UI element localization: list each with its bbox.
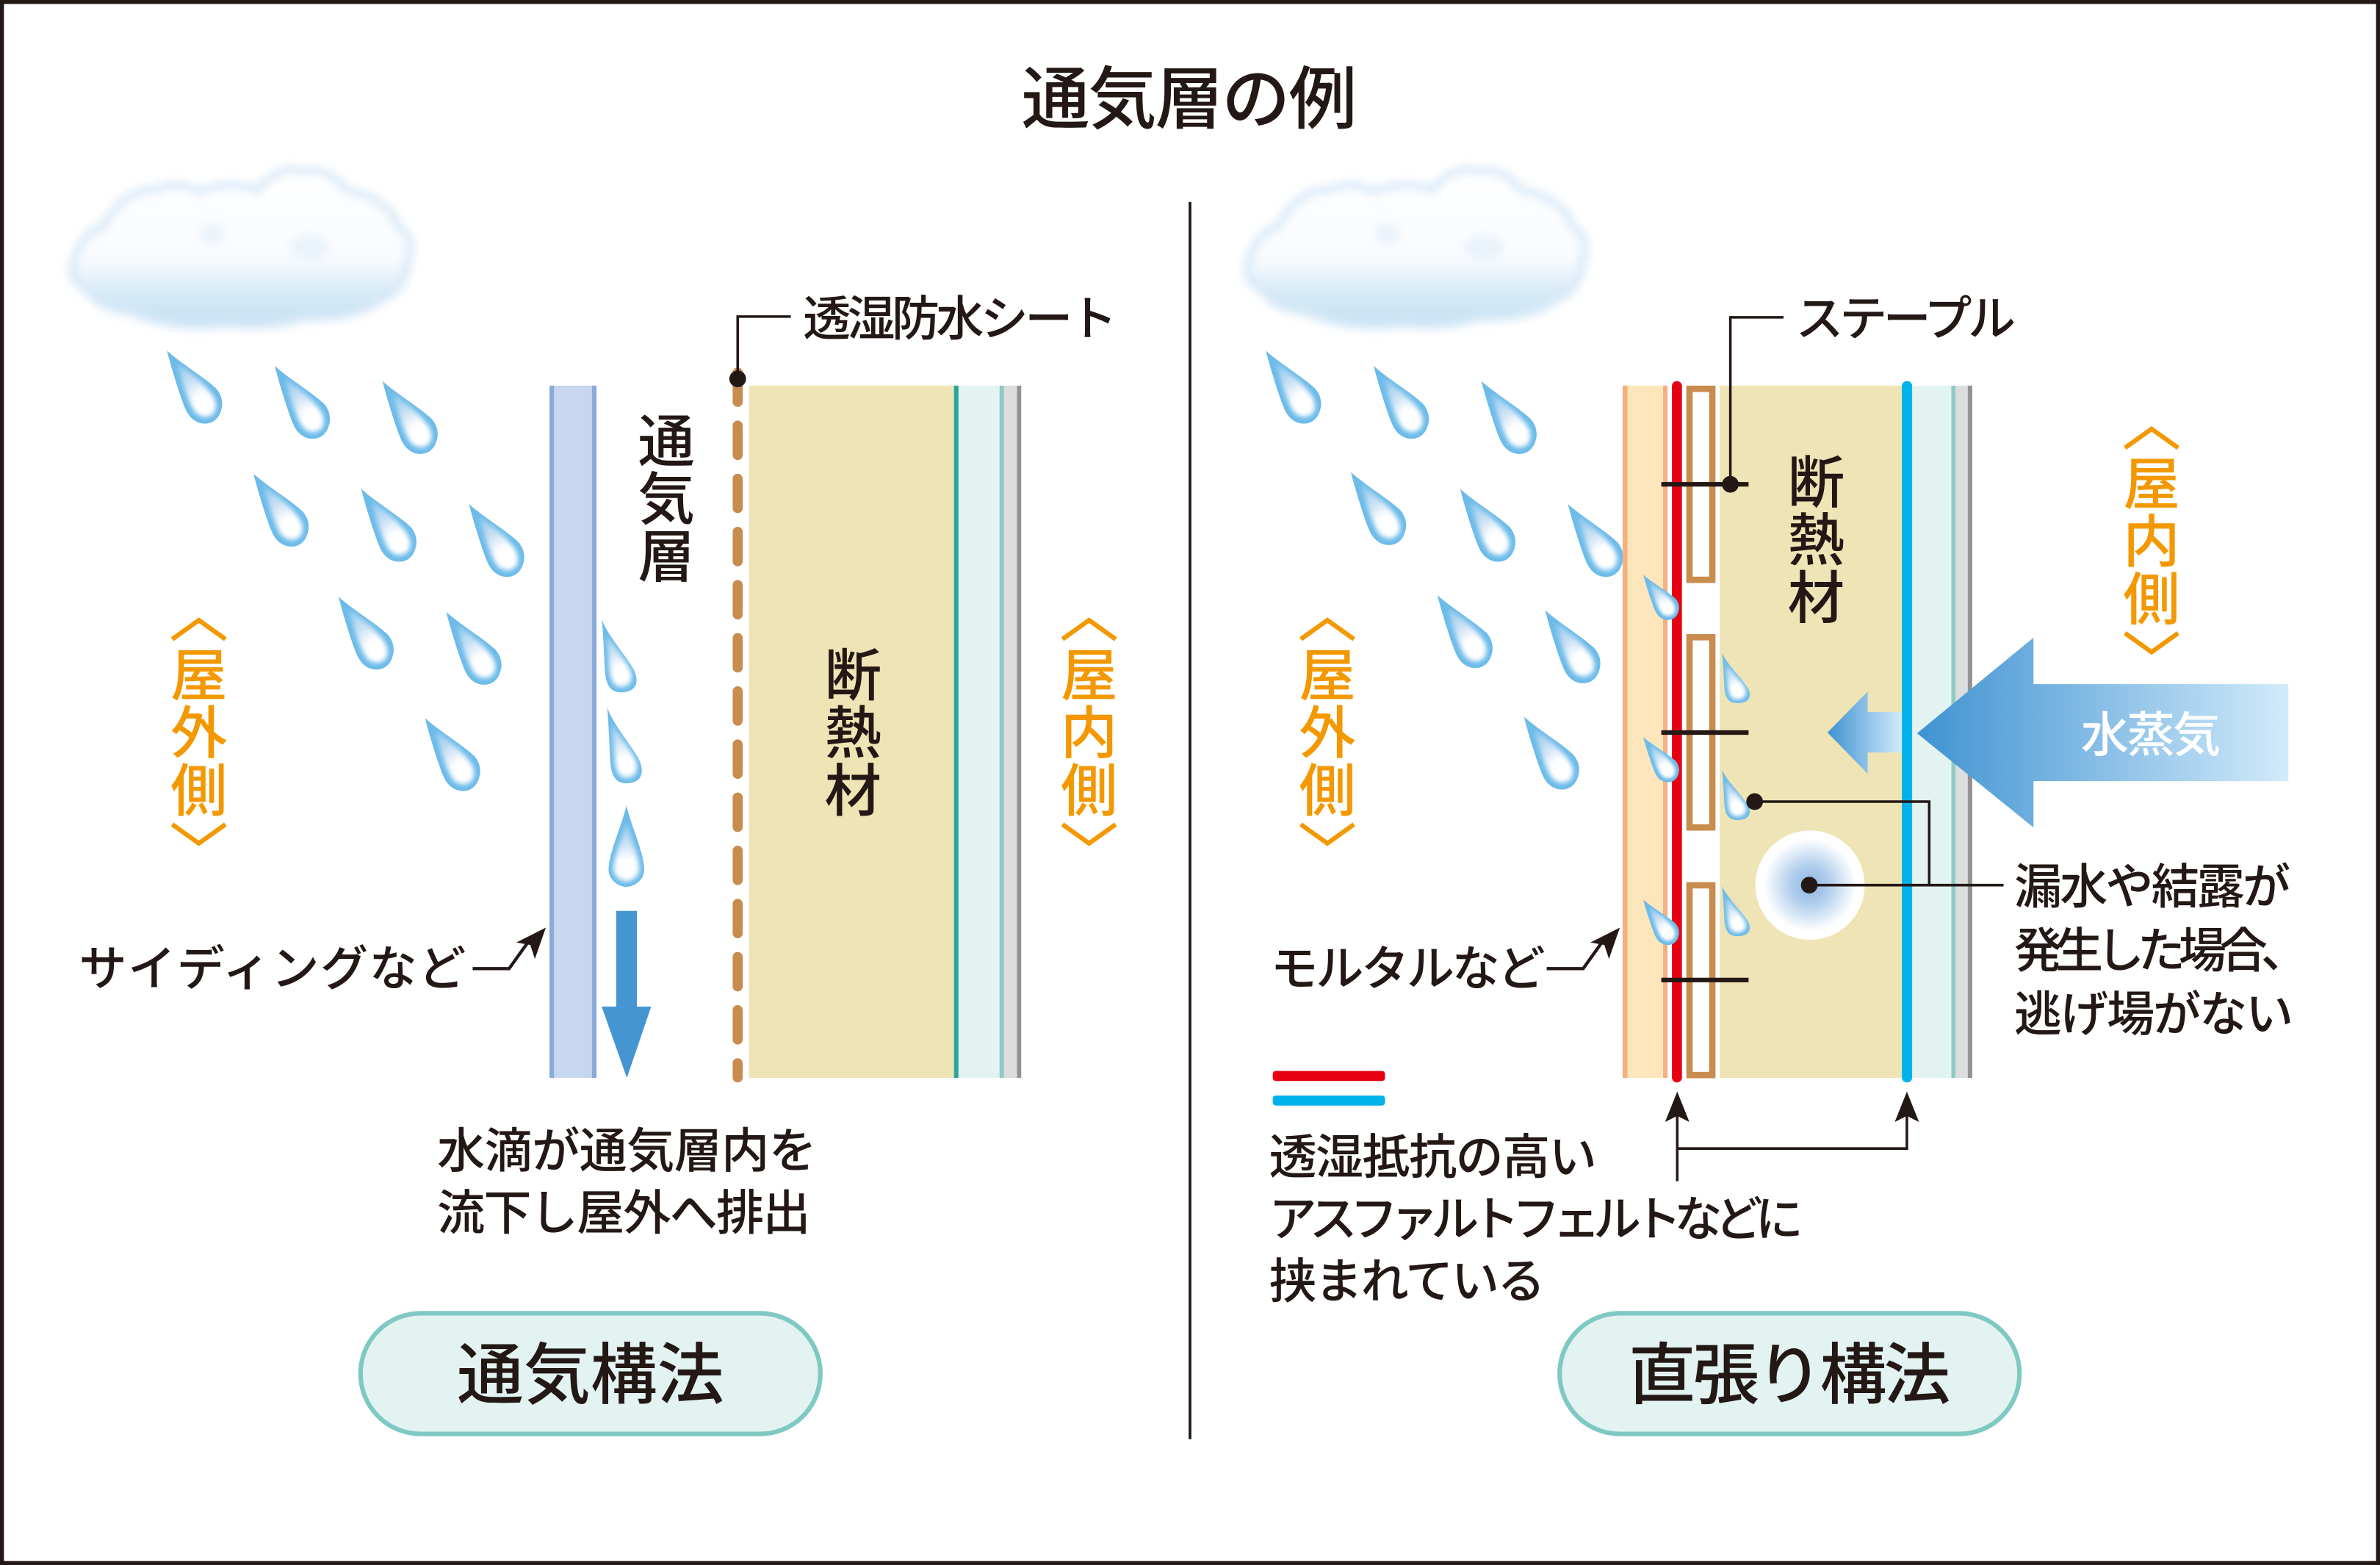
arrow: 水蒸気 — [1917, 638, 2288, 827]
callout: サイディングなど: サイディングなど — [79, 942, 466, 996]
label: 屋内側: 屋 — [1061, 644, 1117, 708]
label: 屋内側: 内 — [1061, 702, 1117, 766]
label: 屋内側: 側 — [1061, 760, 1117, 823]
condensation spot — [1756, 830, 1864, 940]
leader: 透湿防水シート — [729, 292, 1117, 387]
bracket arrows — [1665, 1092, 1919, 1181]
pill: 直張り構法: 直張り構法 — [1629, 1339, 1950, 1413]
caption: 透湿抵抗: 挟まれている — [1269, 1255, 1546, 1309]
label: 断熱材: 熱 — [825, 702, 881, 766]
center divider — [1189, 202, 1191, 1439]
leader: 漏水や結露 — [1746, 794, 2004, 893]
water drops on the sheet — [1643, 575, 1750, 945]
label: 屋外側: 屋 — [170, 644, 227, 708]
callout: モルタルなど: モルタルなど — [1271, 942, 1546, 996]
pill: 通気構法: 通気構法 — [457, 1339, 724, 1413]
panel: 通気構法 — [72, 170, 1117, 1434]
label: 通気層: 層 — [638, 526, 695, 589]
label: 屋内側 — [2123, 429, 2180, 652]
callout: サイディングなど — [79, 928, 546, 996]
label: 屋内側 — [1061, 620, 1117, 843]
label: 屋外側: 側 — [1299, 760, 1356, 823]
label: 屋外側: 外 — [1299, 702, 1356, 766]
label: 屋外側: 側 — [170, 760, 227, 823]
label: 屋外側 — [1299, 620, 1356, 843]
legend lines — [1273, 1071, 1385, 1106]
label: 断熱材: 材 — [1788, 567, 1844, 630]
label: 屋外側: 屋 — [1299, 644, 1356, 708]
raindrops — [1266, 350, 1623, 790]
title: 通気層の例 — [1022, 61, 1357, 137]
caption: 水滴 — [437, 1124, 817, 1240]
caption: 透湿抵抗: アスファルトフェルトなどに — [1269, 1192, 1803, 1246]
label: 断熱材: 断 — [1788, 452, 1844, 515]
text: 漏水や結露が: 逃げ場がない — [2014, 987, 2293, 1041]
label: 断熱材: 断 — [825, 644, 881, 708]
blue sheet line — [1902, 381, 1912, 1082]
icon: cloud — [72, 170, 411, 326]
raindrops — [167, 350, 524, 791]
red sheet line — [1672, 381, 1682, 1082]
caption: 水滴: 水滴が通気層内を — [437, 1124, 817, 1178]
insulation and interior layers — [1720, 386, 1972, 1078]
pill: 通気構法 — [361, 1313, 821, 1434]
dashed moisture-permeable sheet — [732, 367, 743, 1082]
arrow: vapor entering insulation — [1828, 691, 1902, 774]
caption: 水滴: 流下し屋外へ排出 — [437, 1187, 810, 1240]
label: 屋外側 — [170, 620, 227, 843]
label: 屋内側: 内 — [2123, 511, 2180, 575]
text: 漏水や結露が: 漏水や結露が — [2014, 860, 2290, 913]
text: 漏水や結露が — [2014, 860, 2309, 1041]
water drops in the air layer — [602, 619, 644, 887]
caption: 透湿抵抗 — [1269, 1130, 1803, 1309]
insulation and interior layers — [749, 386, 1021, 1078]
furring strips — [1690, 389, 1712, 1075]
label: 屋外側: 外 — [170, 702, 227, 766]
icon: cloud — [1247, 170, 1585, 326]
label: 通気層: 通 — [638, 411, 695, 474]
label: 屋内側: 側 — [2123, 569, 2180, 632]
text: 漏水や結露が: 発生した場合、 — [2014, 924, 2309, 977]
label: 断熱材: 材 — [825, 760, 881, 823]
panel: 直張り構法 — [1247, 170, 2309, 1434]
label: 通気層: 気 — [638, 469, 695, 532]
siding wall layer — [549, 386, 596, 1078]
callout: モルタルなど — [1271, 928, 1620, 996]
leader: 透湿防水シート: 透湿防水シート — [803, 292, 1117, 346]
leader: ステープル: ステープル — [1795, 292, 2016, 346]
label: 断熱材: 熱 — [1788, 509, 1844, 572]
caption: 透湿抵抗: 透湿抵抗の高い — [1269, 1130, 1597, 1184]
staples — [1662, 482, 1748, 982]
leader: ステープル — [1722, 292, 2016, 493]
pill: 直張り構法 — [1559, 1313, 2019, 1434]
arrow: water flows down — [602, 911, 651, 1078]
arrow: 水蒸気: 水蒸気 — [2081, 708, 2221, 762]
mortar layer — [1623, 386, 1667, 1078]
label: 屋内側: 屋 — [2123, 453, 2180, 517]
